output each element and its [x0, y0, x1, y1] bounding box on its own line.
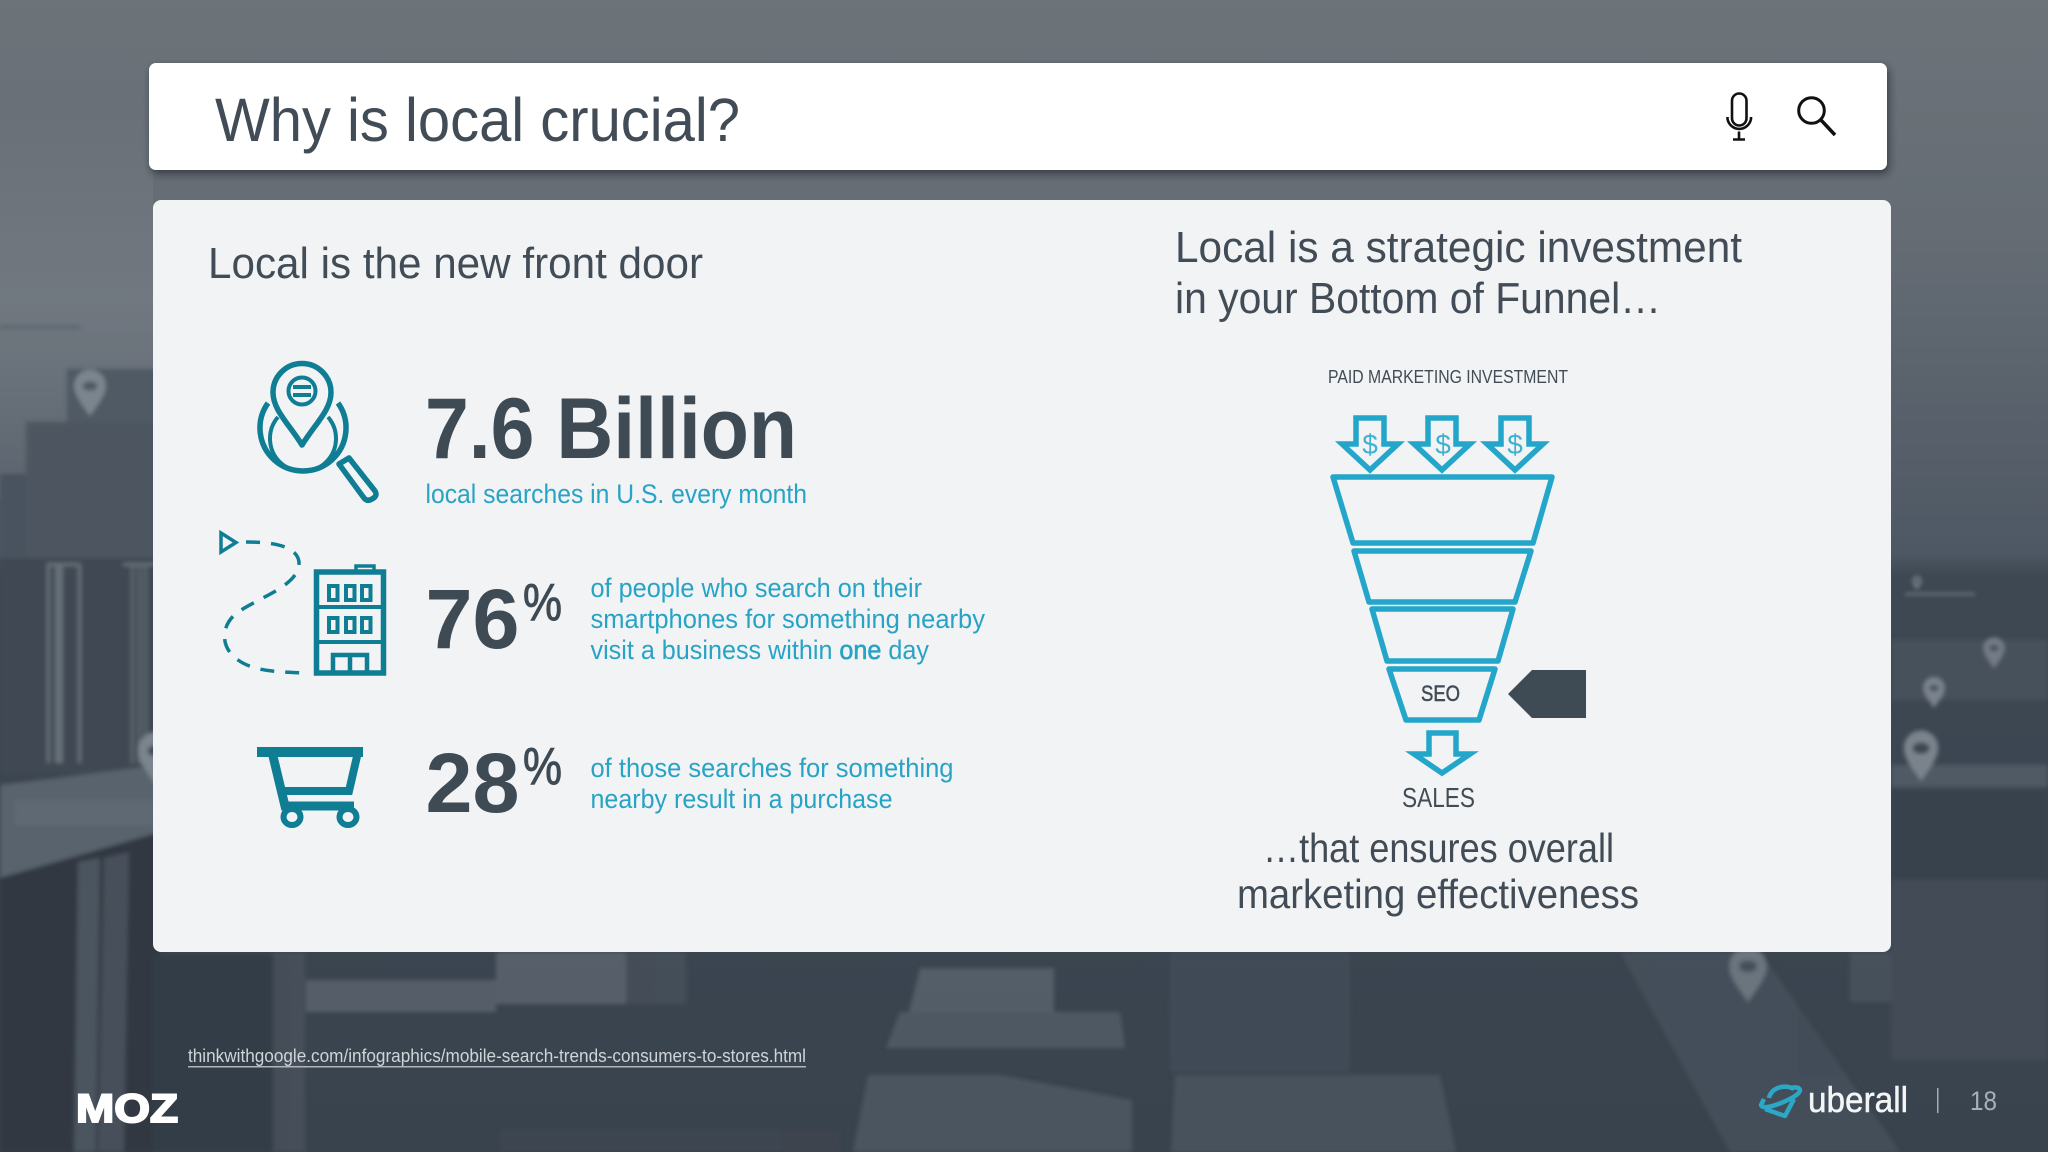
label: sales: SALES [1402, 782, 1475, 813]
heading: strategic investment: in your Bottom of Funnel… [1175, 274, 1661, 323]
source link: thinkwithgoogle.com/infographics/mobile-search-trends-consumers-to-stores.html [188, 1046, 806, 1066]
divider and page number [1937, 1086, 1997, 1116]
icon: search magnifier [1799, 98, 1835, 135]
text: ensures overall marketing effectiveness: …that ensures overall [1263, 825, 1614, 871]
stat: 28%: 28 [426, 736, 520, 830]
text: of those searches [590, 753, 954, 814]
stat: 28% [426, 736, 562, 830]
text: of those searches: of those searches for something [590, 753, 954, 783]
text: of people who search: visit a business within one day [590, 635, 929, 665]
icon: dollar arrows [1342, 418, 1543, 470]
icon: shopping cart [257, 752, 363, 825]
logo: Moz: MOZ [76, 1087, 178, 1131]
text: of people who search: smartphones for something nearby [590, 604, 985, 634]
label: SEO: SEO [1421, 681, 1460, 706]
text: of people who search [590, 573, 985, 665]
label: paid marketing investment: PAID MARKETING INVESTMENT [1328, 367, 1568, 387]
icon: map pin in magnifier [260, 364, 376, 500]
callout: dark tag pointing at SEO [1508, 670, 1586, 718]
funnel tiers [1333, 477, 1552, 720]
divider and page number: 18 [1970, 1086, 1997, 1116]
search bar [149, 63, 1887, 170]
stat: 76% [426, 572, 562, 666]
heading: strategic investment: Local is a strategic investment [1175, 223, 1742, 272]
heading: local is the new front door: Local is the new front door [208, 239, 703, 288]
text: ensures overall marketing effectiveness [1237, 825, 1639, 917]
funnel diagram [1333, 418, 1586, 813]
logo: uberall [1761, 1079, 1908, 1120]
text: of those searches: nearby result in a purchase [590, 784, 892, 814]
icon: dollar arrows: $ [1435, 429, 1451, 460]
text: ensures overall marketing effectiveness: marketing effectiveness [1237, 871, 1639, 917]
stat caption: local searches: local searches in U.S. every month [426, 479, 807, 509]
icon: dollar arrows: $ [1362, 429, 1378, 460]
stat: 7.6 Billion: 7.6 Billion [425, 381, 797, 477]
heading: strategic investment [1175, 223, 1742, 323]
icon: dollar arrows: $ [1507, 429, 1523, 460]
title: Why is local crucial? [215, 86, 740, 154]
icon: route to building [221, 533, 384, 673]
panel: main content [153, 200, 1891, 952]
icon: uberall planet [1761, 1087, 1800, 1116]
arrow: to sales [1414, 733, 1470, 773]
stat: 76%: % [523, 574, 562, 632]
text: of people who search: of people who search on their [590, 573, 922, 603]
stat: 76%: 76 [426, 572, 520, 666]
logo: uberall: uberall [1808, 1079, 1908, 1120]
icon: microphone [1728, 94, 1751, 140]
stat: 28%: % [523, 738, 562, 796]
